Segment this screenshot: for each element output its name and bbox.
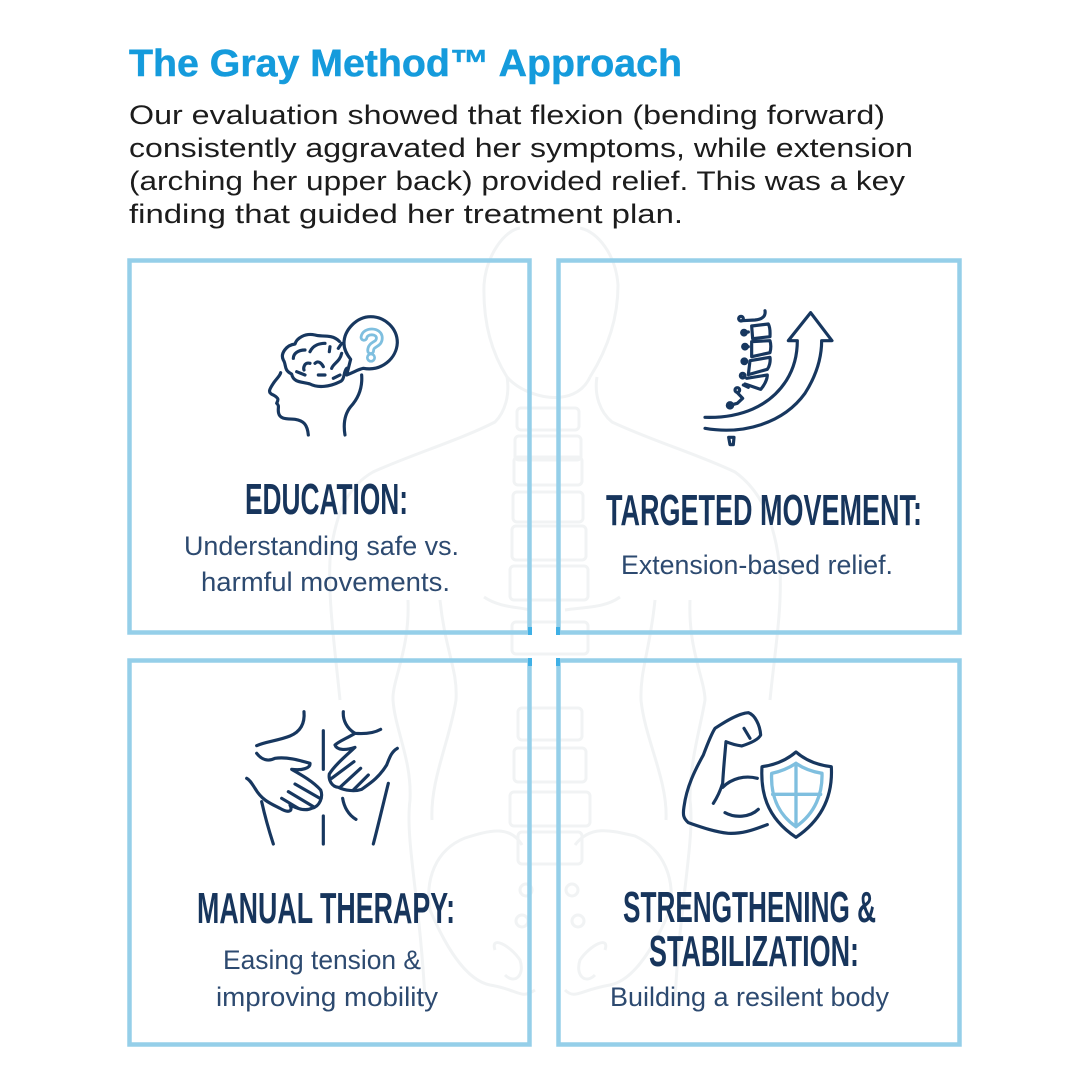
intro paragraph: finding that guided her treatment plan. [129, 199, 683, 229]
intro paragraph: (arching her upper back) provided relief. This was a key [129, 166, 906, 196]
text: education description: harmful movements. [201, 567, 450, 597]
icon: flexed arm and shield [683, 713, 831, 837]
panel: targeted movement [558, 260, 960, 632]
text: targeted movement description: Extension-based relief. [621, 550, 893, 580]
heading: strengthening and stabilization [623, 883, 876, 976]
icon: head with brain and question mark [270, 317, 397, 435]
text: manual therapy description: improving mobility [216, 982, 439, 1012]
heading: manual therapy: MANUAL THERAPY: [197, 884, 455, 933]
icon: hands on lower back [247, 712, 397, 844]
text: strengthening description: Building a resilent body [610, 982, 890, 1012]
intro paragraph: consistently aggravated her symptoms, while extension [129, 133, 913, 163]
text: education description [184, 531, 459, 597]
panel: manual therapy [130, 660, 530, 1044]
heading: strengthening and stabilization: STRENGTHENING & [623, 883, 876, 932]
icon: spine with upward arrow [705, 311, 832, 445]
intro paragraph: Our evaluation showed that flexion (bending forward) [129, 100, 885, 130]
intro paragraph [129, 100, 913, 229]
heading: strengthening and stabilization: STABILIZATION: [649, 927, 859, 976]
text: education description: Understanding safe vs. [184, 531, 459, 561]
text: manual therapy description [216, 945, 439, 1012]
panel: strengthening and stabilization [558, 660, 960, 1044]
panel: education [130, 260, 530, 632]
background: body silhouette with spine [330, 228, 780, 1000]
text: manual therapy description: Easing tension & [223, 945, 421, 975]
title: The Gray Method™ Approach [129, 43, 682, 85]
heading: education: EDUCATION: [245, 475, 408, 524]
